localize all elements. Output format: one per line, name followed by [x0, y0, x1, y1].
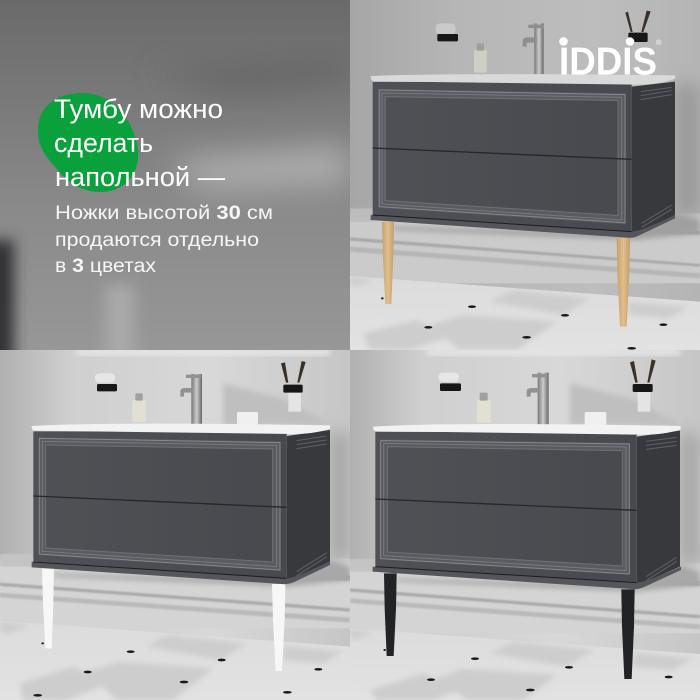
cabinet	[371, 74, 700, 238]
cabinet	[373, 424, 700, 589]
subheading text: продаются отдельно	[55, 230, 259, 251]
marble floor	[350, 628, 700, 700]
accessories	[438, 359, 656, 425]
green blob	[38, 93, 138, 192]
marble floor	[0, 621, 350, 700]
legs	[382, 222, 630, 327]
legs	[384, 573, 635, 679]
heading: сделать	[54, 128, 153, 158]
background: blurred interior	[0, 0, 350, 380]
heading	[54, 98, 225, 186]
panel: text on grey background	[0, 0, 350, 380]
marble floor	[350, 276, 700, 350]
heading: Тумбу можно	[54, 94, 223, 124]
logo: IDDIS: IDDIS	[559, 40, 657, 84]
panel: cabinet with black legs	[350, 350, 700, 700]
cabinet	[32, 424, 350, 584]
skirting moulding	[0, 554, 350, 628]
skirting moulding	[350, 559, 700, 633]
heading: напольной —	[55, 162, 226, 192]
subheading text	[55, 203, 273, 277]
logo: IDDIS: ®	[656, 38, 662, 47]
subheading text: Ножки высотой 30 см	[55, 203, 273, 224]
subheading text: в 3 цветах	[55, 256, 157, 277]
panel: cabinet with wooden legs	[350, 0, 700, 350]
panel: cabinet with white legs	[0, 350, 350, 700]
wall	[350, 0, 700, 302]
accessories	[95, 361, 306, 425]
legs	[42, 568, 285, 671]
wall	[350, 350, 700, 654]
wall	[0, 350, 350, 647]
skirting moulding	[350, 208, 700, 283]
accessories	[436, 11, 651, 74]
